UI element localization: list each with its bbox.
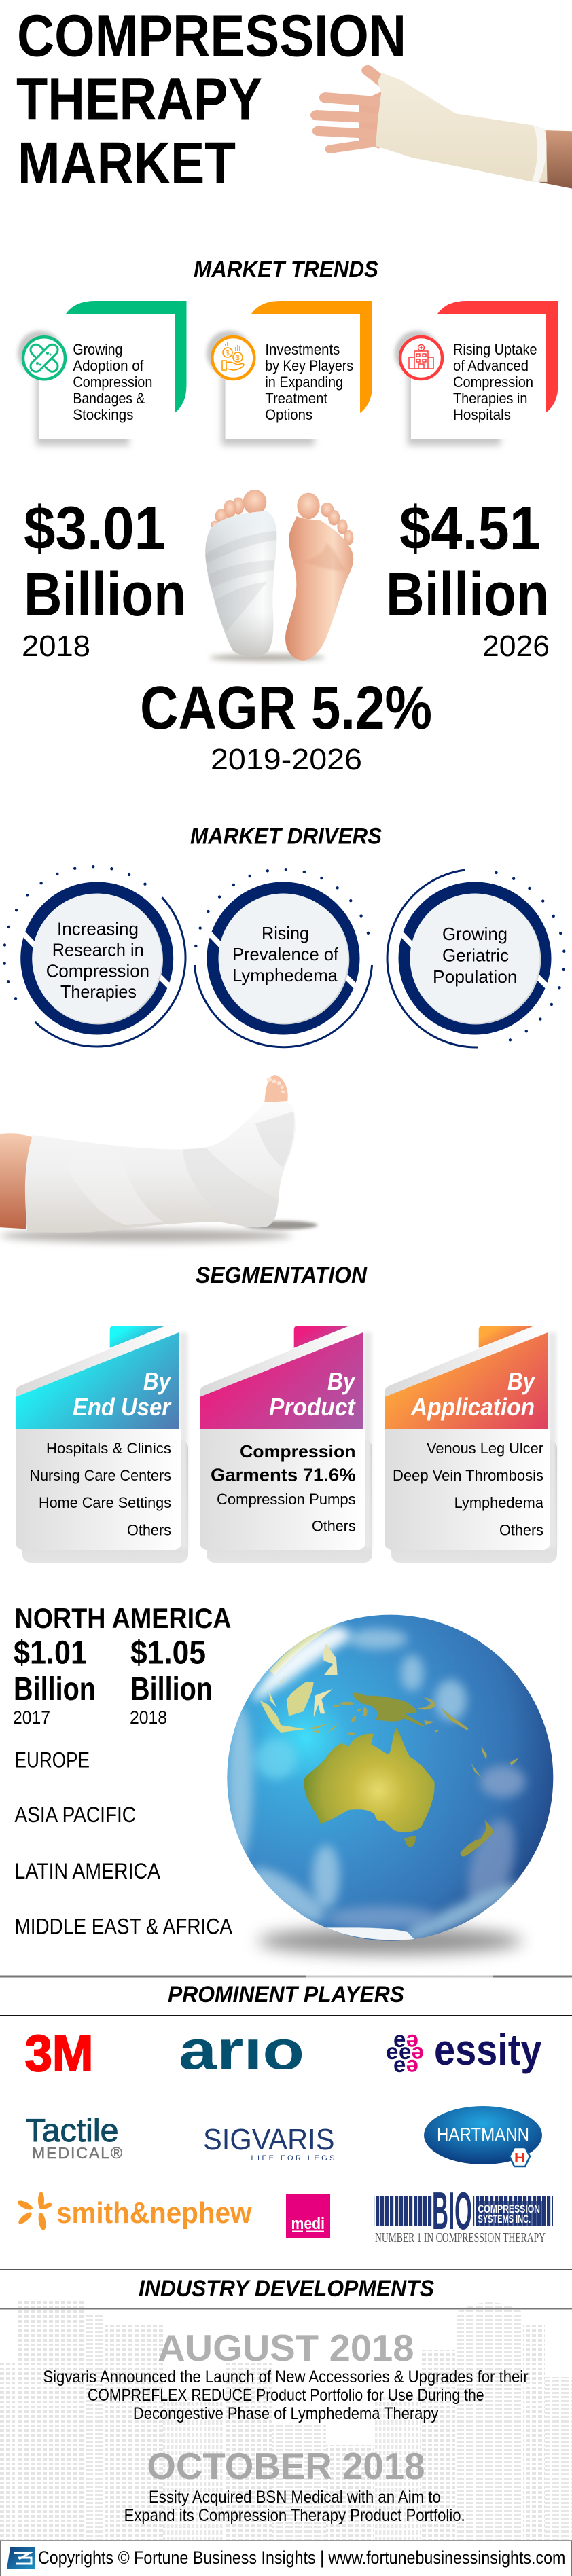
regional values: ASIA PACIFIC [15, 1802, 136, 1827]
logo: medi [286, 2194, 330, 2238]
panel: trend 3: Rising Uptake [453, 341, 537, 358]
icon: hospital [400, 337, 442, 379]
stat: 2018 market value: $3.01 [24, 494, 166, 562]
development: october 2018: OCTOBER 2018 [147, 2445, 425, 2487]
panel: trend 3: of Advanced [453, 357, 529, 374]
logo: hartmann [424, 2106, 542, 2166]
regional values: $1.01 [14, 1635, 87, 1671]
rule: players top [0, 1975, 572, 1978]
development: october 2018: Essity Acquired BSN Medical with an Aim to [149, 2488, 441, 2507]
panel: by application: Deep Vein Thrombosis [393, 1467, 543, 1484]
panel: by end user: Others [127, 1522, 171, 1539]
development: august 2018 [43, 2327, 529, 2423]
gloss highlight [251, 1627, 350, 1701]
icon: fortune business insights [7, 2547, 35, 2569]
panel: trend 2: by Key Players [265, 357, 353, 374]
panel: trend 2: Treatment [265, 390, 328, 407]
panel: driver 1: Research in [52, 939, 144, 960]
development: october 2018: Expand its Compression Therapy Product Portfolio. [124, 2506, 465, 2525]
panel: by product: Compression [240, 1441, 356, 1462]
rule: developments top [0, 2269, 572, 2270]
stat: cagr [140, 674, 432, 776]
panel: driver 2: Prevalence of [232, 944, 339, 964]
panel: by end user [16, 1326, 188, 1563]
panel: driver 1 [4, 867, 185, 1047]
regional values: EUROPE [15, 1748, 90, 1773]
stat: cagr: 2019-2026 [211, 743, 362, 776]
development: august 2018: Decongestive Phase of Lymphedema Therapy [133, 2404, 439, 2423]
logo: sigvaris: SIGVARIS [203, 2123, 334, 2156]
panel: driver 3: Growing [442, 924, 507, 944]
regional values: Billion [130, 1671, 213, 1707]
image: bandaged hand [317, 71, 572, 189]
panel: driver 3: Geriatric [442, 945, 509, 966]
panel: driver 2: Rising [262, 923, 309, 943]
title: COMPRESSION [17, 3, 406, 69]
title [16, 3, 406, 196]
development: october 2018 [124, 2445, 465, 2525]
panel: by end user: By [143, 1367, 172, 1395]
panel: trend 3: Compression [453, 374, 533, 391]
stat: cagr: CAGR 5.2% [140, 674, 432, 742]
rule: players bottom [0, 2015, 572, 2016]
logo: essity: e [399, 2039, 411, 2064]
logo: hartmann: HARTMANN [437, 2124, 529, 2145]
heading: market trends: MARKET TRENDS [194, 257, 378, 283]
regional values: MIDDLE EAST & AFRICA [15, 1914, 233, 1938]
icon: coins in hand [212, 337, 254, 379]
logo: sigvaris: LIFE FOR LEGS [251, 2154, 334, 2162]
stat: 2026 market value: 2026 [482, 630, 550, 663]
development: august 2018: COMPREFLEX REDUCE Product Portfolio for Use During the [88, 2386, 484, 2405]
icon: bandage [23, 337, 65, 379]
panel: by end user: Hospitals & Clinics [46, 1440, 171, 1457]
land: new guinea [352, 1693, 426, 1727]
regional values: 2018 [130, 1707, 167, 1728]
panel: by end user: Nursing Care Centers [30, 1467, 171, 1484]
logo: hartmann: H [514, 2151, 525, 2166]
regional values: 2017 [13, 1707, 50, 1728]
background: city skyline [0, 2299, 572, 2540]
logo: essity: e [393, 2052, 406, 2077]
rule: developments bottom [0, 2308, 572, 2309]
logo: 3M: 3M [24, 2025, 94, 2082]
panel: by application: Application [410, 1393, 535, 1421]
stat: 2026 market value: Billion [386, 561, 549, 629]
regional values: NORTH AMERICA [15, 1602, 231, 1634]
heading: market drivers: MARKET DRIVERS [190, 823, 382, 849]
logo: essity: e [393, 2027, 406, 2052]
logo: bio compression systems: BIO [432, 2181, 472, 2241]
icon: coins in hand: $ [226, 350, 230, 357]
heading: segmentation: SEGMENTATION [196, 1263, 368, 1288]
panel: trend 3 [395, 301, 558, 446]
footer [0, 2541, 572, 2576]
image: two feet [205, 490, 353, 661]
panel: trend 1: Stockings [73, 406, 133, 423]
development: august 2018: AUGUST 2018 [158, 2327, 414, 2369]
stat: 2026 market value: $4.51 [399, 494, 541, 562]
logo: essity: e [412, 2042, 424, 2067]
panel: trend 3: Hospitals [453, 406, 511, 423]
panel: trend 2: Options [265, 406, 312, 423]
panel: by product [200, 1326, 372, 1563]
panel: driver 1: Increasing [57, 919, 139, 939]
panel: trend 1: Growing [73, 341, 122, 358]
panel: by application: By [507, 1367, 536, 1395]
panel: by application: Others [499, 1522, 543, 1539]
stat: 2026 market value [386, 494, 550, 663]
logo: essity: e [386, 2039, 398, 2064]
panel: by product: Compression Pumps [217, 1491, 356, 1508]
logo: arjo: arjo [179, 2018, 304, 2082]
logo: smith and nephew: smith&nephew [56, 2196, 252, 2230]
panel: driver 3 [387, 870, 565, 1047]
panel: by product: Product [269, 1393, 356, 1421]
panel: trend 3: Therapies in [453, 390, 527, 407]
panel: driver 3: Population [433, 966, 518, 987]
panel: trend 1: Bandages & [73, 390, 145, 407]
panel: by application: Lymphedema [454, 1494, 544, 1511]
heading: industry developments: INDUSTRY DEVELOPMENTS [139, 2276, 434, 2302]
panel: trend 1: Compression [73, 374, 152, 391]
panel: by application: Venous Leg Ulcer [427, 1440, 543, 1457]
panel: by end user: Home Care Settings [39, 1494, 171, 1511]
title: THERAPY [16, 67, 262, 132]
antarctica [326, 1927, 414, 1940]
logo: tactile medical: Tactile [26, 2112, 118, 2148]
image: bandaged leg [0, 1075, 317, 1242]
land: indonesia and philippines [260, 1644, 338, 1733]
logo: essity: e [406, 2055, 418, 2080]
panel: by product: Others [312, 1518, 356, 1535]
regional values: Billion [14, 1671, 96, 1707]
logo: essity: e [406, 2030, 418, 2055]
logo: tactile medical: MEDICAL® [32, 2144, 122, 2162]
icon: coins in hand: $ [236, 355, 240, 362]
panel: by product: Garments 71.6% [211, 1465, 356, 1485]
stat: 2018 market value: Billion [24, 561, 186, 629]
land: new zealand [460, 1819, 493, 1857]
panel: driver 2 [194, 869, 372, 1047]
regional values [13, 1602, 233, 1938]
heading: prominent players: PROMINENT PLAYERS [168, 1982, 404, 2008]
logo: bio compression systems: COMPRESSION [478, 2202, 540, 2215]
logo: smith and nephew [16, 2192, 252, 2231]
regional values: $1.05 [130, 1635, 206, 1671]
logo: bio compression systems [374, 2181, 553, 2245]
panel: by product: By [327, 1367, 356, 1395]
logo: medi: medi [291, 2215, 325, 2233]
regional values: LATIN AMERICA [15, 1859, 161, 1883]
logo: essity [386, 2025, 542, 2080]
panel: trend 2: in Expanding [265, 374, 343, 391]
panel: driver 2: Lymphedema [232, 965, 338, 985]
panel: driver 1: Therapies [60, 981, 137, 1002]
title: MARKET [18, 130, 236, 196]
logo: essity: essity [434, 2025, 542, 2074]
logo: tactile medical [26, 2112, 122, 2162]
stat: 2018 market value [22, 494, 186, 663]
cloud streaks [228, 1629, 527, 1950]
panel: trend 1: Adoption of [73, 357, 144, 374]
stat: 2018 market value: 2018 [22, 630, 90, 663]
panel: driver 1: Compression [46, 960, 149, 981]
panel: trend 2: Investments [265, 341, 340, 358]
logo: bio compression systems: SYSTEMS INC. [478, 2213, 531, 2226]
panel: trend 2 [207, 301, 372, 446]
panel: trend 1 [18, 301, 186, 446]
land: arc top left [270, 1624, 336, 1675]
land: australia [304, 1728, 435, 1832]
panel: by application [385, 1326, 557, 1563]
image: globe [227, 1615, 553, 1955]
panel: by end user: End User [73, 1393, 172, 1421]
